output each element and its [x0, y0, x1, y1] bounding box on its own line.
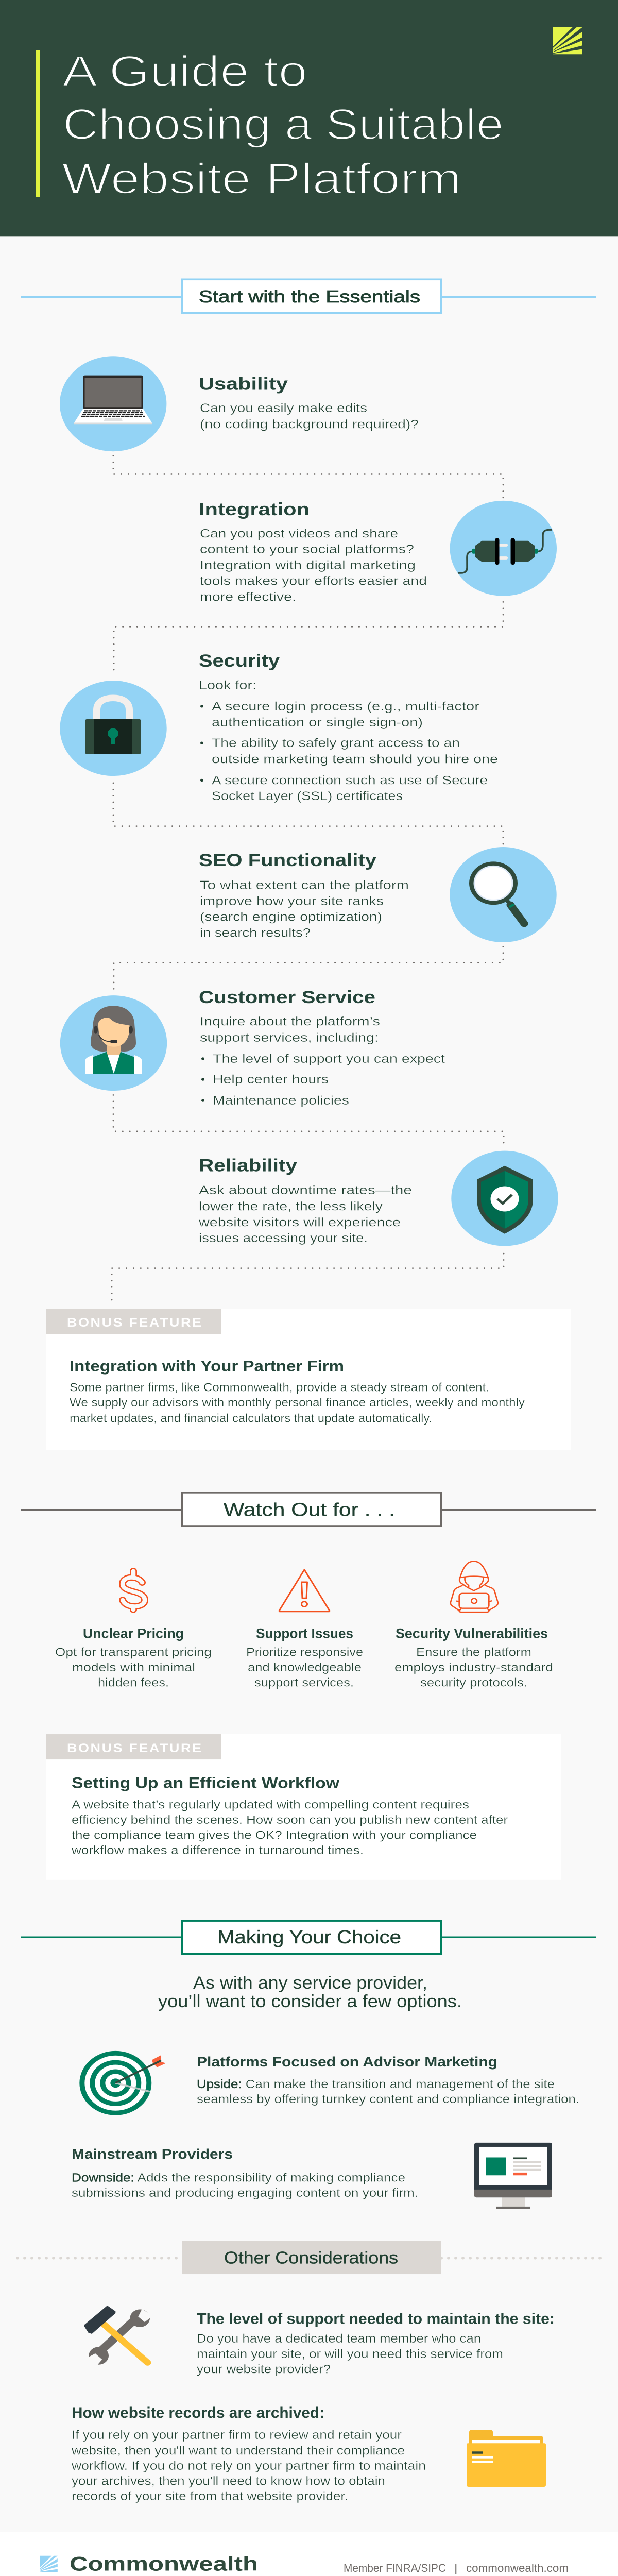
- body text: issues accessing your site.: [199, 1231, 368, 1245]
- section heading: start with the essentials: [21, 279, 596, 313]
- tag: bonus feature: [46, 1734, 221, 1759]
- icon: desktop monitor: [474, 2143, 552, 2209]
- body text: workflow. If you do not rely on your partner firm to maintain: [71, 2459, 426, 2473]
- body text: Can you post videos and share: [200, 527, 398, 540]
- panel: mainstream providers: [72, 2143, 552, 2209]
- heading: reliability: Reliability: [199, 1155, 297, 1175]
- body text and bullets: [199, 679, 498, 803]
- body text: submissions and producing engaging content on your firm.: [72, 2187, 418, 2200]
- body text: hidden fees.: [98, 1676, 169, 1689]
- header banner: [0, 0, 618, 236]
- icon: shield with check: [451, 1151, 558, 1246]
- body text: Do you have a dedicated team member who can: [197, 2332, 481, 2346]
- body text: your archives, then you'll need to know how to obtain: [72, 2475, 385, 2488]
- panel: reliability: [198, 1151, 558, 1246]
- body text: If you rely on your partner firm to review and retain your: [72, 2429, 402, 2442]
- body text: and knowledgeable: [248, 1661, 362, 1674]
- icon: folder: [467, 2430, 546, 2487]
- body text: content to your social platforms?: [200, 543, 414, 556]
- body text and bullets: support services, including:: [200, 1031, 379, 1045]
- footer text: |: [454, 2562, 457, 2575]
- tag: bonus feature: BONUS FEATURE: [67, 1741, 202, 1755]
- heading: Integration with Your Partner Firm: [70, 1358, 344, 1375]
- body text: in search results?: [200, 926, 311, 940]
- panel: platforms focused on advisor marketing: [79, 2051, 579, 2115]
- body text: [394, 1646, 553, 1689]
- body text and bullets: Help center hours: [213, 1073, 329, 1087]
- body text: more effective.: [200, 590, 296, 604]
- body text and bullets: A secure connection such as use of Secure: [212, 774, 488, 787]
- body text and bullets: Maintenance policies: [213, 1094, 349, 1108]
- title: Website Platform: [62, 155, 461, 203]
- section heading: other considerations: Other Considerations: [224, 2248, 398, 2267]
- body text: (no coding background required)?: [200, 418, 419, 431]
- heading: Mainstream Providers: [72, 2147, 233, 2162]
- heading: integration: Integration: [199, 499, 310, 519]
- body text: [197, 2332, 503, 2376]
- body text: [200, 527, 427, 604]
- body text and bullets: Look for:: [199, 679, 256, 692]
- body text: [71, 1799, 508, 1857]
- panel: bonus feature, efficient workflow: [46, 1734, 561, 1880]
- body text: A website that’s regularly updated with compelling content requires: [72, 1799, 469, 1811]
- body text: Opt for transparent pricing: [55, 1646, 212, 1659]
- body text and bullets: The ability to safely grant access to an: [212, 737, 460, 750]
- body text: support services.: [254, 1676, 354, 1689]
- body text: We supply our advisors with monthly personal finance articles, weekly and monthly: [70, 1396, 525, 1410]
- panel: website records: [71, 2404, 546, 2503]
- body text: security protocols.: [420, 1676, 527, 1689]
- icon: dollar sign: [123, 1571, 145, 1609]
- tag: bonus feature: BONUS FEATURE: [67, 1316, 202, 1330]
- wordmark: Commonwealth: [70, 2552, 258, 2575]
- body text and bullets: authentication or single sign-on): [212, 716, 423, 730]
- title: [62, 47, 504, 203]
- icon: laptop: [60, 356, 166, 451]
- icon: padlock: [60, 681, 167, 776]
- icon: hammer and wrench: [84, 2306, 153, 2366]
- heading: customer service: Customer Service: [199, 987, 375, 1007]
- body text: your website provider?: [197, 2363, 331, 2376]
- body text: [197, 2078, 579, 2106]
- panel: security: [60, 651, 498, 803]
- body text: lower the rate, the less likely: [199, 1200, 383, 1213]
- body text: Can you easily make edits: [200, 401, 367, 415]
- section heading: watch out for: Watch Out for . . .: [224, 1500, 395, 1520]
- icon: sunburst logo: [553, 27, 582, 54]
- section heading: watch out for: [21, 1493, 596, 1526]
- body text: Upside: Can make the transition and management of the site: [197, 2078, 555, 2091]
- body text: tools makes your efforts easier and: [200, 574, 427, 588]
- intro text: [158, 1973, 462, 2011]
- footer text: Member FINRA/SIPC: [344, 2562, 446, 2575]
- section heading: start with the essentials: Start with the Essentials: [199, 287, 420, 306]
- body text: records of your site from that website provider.: [72, 2489, 348, 2503]
- panel: security vulnerabilities: [394, 1561, 553, 1689]
- heading: Platforms Focused on Advisor Marketing: [197, 2054, 497, 2070]
- body text and bullets: A secure login process (e.g., multi-factor: [212, 700, 480, 714]
- heading: security: Security: [199, 651, 280, 671]
- body text: [55, 1646, 212, 1689]
- body text: Integration with digital marketing: [200, 558, 416, 572]
- dotted connector path: [112, 456, 504, 1303]
- panel: level of support: [84, 2306, 555, 2376]
- body text: maintain your site, or will you need this service from: [197, 2348, 503, 2361]
- body text: improve how your site ranks: [200, 894, 384, 908]
- panel: customer service: [60, 987, 445, 1108]
- body text: (search engine optimization): [200, 910, 382, 924]
- footer text: commonwealth.com: [466, 2562, 569, 2575]
- panel: seo functionality: [199, 847, 557, 942]
- title: Choosing a Suitable: [63, 100, 504, 149]
- body text: market updates, and financial calculators that update automatically.: [70, 1412, 432, 1425]
- intro text: As with any service provider,: [193, 1973, 427, 1993]
- body text: employs industry-standard: [394, 1661, 553, 1674]
- body text: Prioritize responsive: [246, 1646, 363, 1659]
- panel: unclear pricing: [55, 1571, 212, 1689]
- body text: seamless by offering turnkey content and compliance integration.: [197, 2093, 579, 2106]
- body text: [200, 401, 419, 431]
- section heading: making your choice: [21, 1921, 596, 1954]
- body text: the compliance team gives the OK? Integration with your compliance: [72, 1829, 477, 1842]
- panel: bonus feature, partner firm: [46, 1309, 571, 1450]
- heading: seo functionality: SEO Functionality: [199, 850, 376, 870]
- body text and bullets: Inquire about the platform’s: [200, 1015, 380, 1028]
- icon: support agent: [60, 995, 167, 1091]
- body text: [200, 878, 409, 940]
- intro text: you’ll want to consider a few options.: [158, 1991, 462, 2011]
- body text: Some partner firms, like Commonwealth, provide a steady stream of content.: [70, 1381, 489, 1394]
- body text: Ask about downtime rates—the: [199, 1183, 412, 1197]
- tag: bonus feature: [46, 1309, 221, 1334]
- icon: target with arrow: [79, 2051, 166, 2115]
- panel: usability: [60, 356, 419, 451]
- body text: models with minimal: [72, 1661, 195, 1674]
- icon: warning triangle: [279, 1570, 330, 1612]
- body text: [70, 1381, 525, 1425]
- panel: support issues: [246, 1570, 363, 1689]
- heading: Setting Up an Efficient Workflow: [72, 1774, 340, 1791]
- section heading: other considerations: [18, 2241, 606, 2274]
- section heading: making your choice: Making Your Choice: [217, 1927, 401, 1947]
- body text: [198, 1183, 412, 1245]
- body text: [71, 2429, 426, 2503]
- panel: integration: [199, 499, 557, 604]
- heading: How website records are archived:: [72, 2404, 324, 2421]
- icon: plug: [450, 501, 557, 596]
- body text and bullets: [200, 1015, 445, 1108]
- heading: Unclear Pricing: [83, 1626, 184, 1641]
- footer: [0, 2532, 618, 2576]
- title: A Guide to: [62, 47, 307, 96]
- heading: Security Vulnerabilities: [396, 1626, 548, 1641]
- heading: Support Issues: [256, 1626, 353, 1641]
- body text: [246, 1646, 363, 1689]
- footer text: [344, 2562, 569, 2575]
- body text: website, then you'll want to understand their compliance: [71, 2444, 405, 2458]
- body text: website visitors will experience: [198, 1216, 401, 1229]
- body text: To what extent can the platform: [200, 878, 409, 892]
- icon: hooded hacker: [451, 1561, 498, 1612]
- body text and bullets: Socket Layer (SSL) certificates: [212, 789, 403, 803]
- body text: workflow makes a difference in turnaround times.: [71, 1844, 364, 1857]
- heading: The level of support needed to maintain the site:: [197, 2310, 555, 2327]
- accent bar: [36, 50, 40, 197]
- body text: [72, 2172, 418, 2200]
- body text and bullets: outside marketing team should you hire one: [212, 753, 498, 766]
- body text and bullets: The level of support you can expect: [213, 1052, 445, 1066]
- icon: magnifying glass: [450, 847, 557, 942]
- icon: commonwealth logo: [40, 2556, 58, 2572]
- body text: Downside: Adds the responsibility of making compliance: [72, 2172, 405, 2184]
- body text: efficiency behind the scenes. How soon can you publish new content after: [72, 1814, 508, 1827]
- body text: Ensure the platform: [416, 1646, 531, 1659]
- heading: usability: Usability: [199, 374, 288, 394]
